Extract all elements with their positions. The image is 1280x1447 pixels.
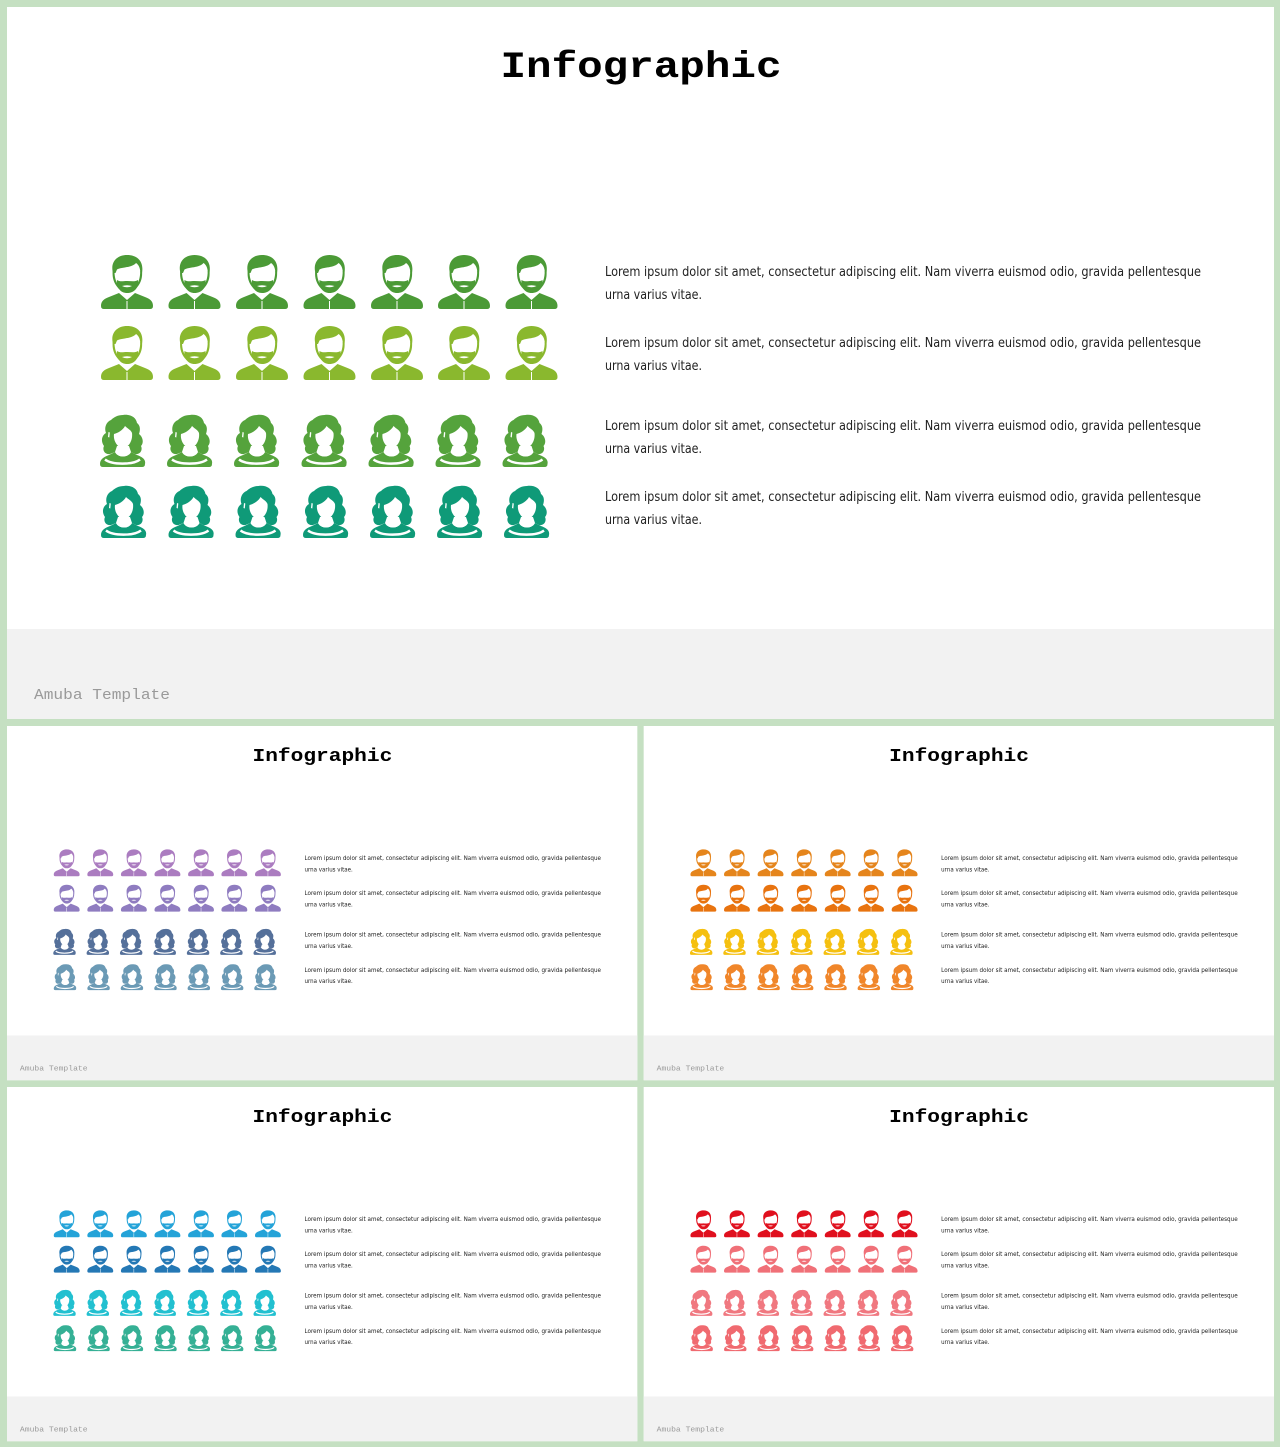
text block 3: urna varius vitae. [941,942,990,950]
text block 1: urna varius vitae. [305,865,353,873]
text block 1: urna varius vitae. [305,1226,353,1234]
panel: purple slide [7,726,637,1080]
text block 4 [305,966,601,985]
icon row: men, violet [54,885,281,912]
text block 1 [305,1215,601,1234]
text block 3: Lorem ipsum dolor sit amet, consectetur adipiscing elit. Nam viverra euismod odio, gravida pellentesque [605,419,1201,434]
text block 2: urna varius vitae. [941,1262,990,1270]
text block 2: Lorem ipsum dolor sit amet, consectetur adipiscing elit. Nam viverra euismod odio, gravida pellentesque [305,889,601,897]
text block 4: urna varius vitae. [305,1338,353,1346]
slide background [644,726,1274,1080]
slide background [7,726,637,1080]
icon row: women, yellow [690,929,913,955]
text block 2: Lorem ipsum dolor sit amet, consectetur adipiscing elit. Nam viverra euismod odio, gravida pellentesque [305,1250,601,1258]
title: Infographic [889,1107,1029,1128]
text block 3 [305,930,601,950]
icon row: women, teal [101,486,549,538]
text block 3 [941,1291,1238,1311]
text block 2: Lorem ipsum dolor sit amet, consectetur adipiscing elit. Nam viverra euismod odio, gravida pellentesque [605,336,1201,351]
text block 4: urna varius vitae. [605,513,702,528]
icon row: men, orange [690,849,918,876]
icon row: men, red [690,1210,918,1237]
icon row: men, blue [54,1246,281,1273]
text block 1 [605,265,1201,303]
icon row: women, orange [690,964,913,990]
icon row: men, dark green [101,255,558,309]
icon row: men, dark orange [690,885,918,912]
text block 4: Lorem ipsum dolor sit amet, consectetur adipiscing elit. Nam viverra euismod odio, gravida pellentesque [305,1327,601,1335]
text block 2: urna varius vitae. [941,901,990,909]
text block 1: urna varius vitae. [941,1226,990,1234]
text block 2: urna varius vitae. [605,359,702,374]
text block 1: urna varius vitae. [605,288,702,303]
text block 1: Lorem ipsum dolor sit amet, consectetur adipiscing elit. Nam viverra euismod odio, gravida pellentesque [605,265,1201,280]
text block 1 [941,1215,1238,1234]
icon row: men, light green [101,326,558,380]
icon row: men, purple [54,849,281,876]
text block 3: Lorem ipsum dolor sit amet, consectetur adipiscing elit. Nam viverra euismod odio, gravida pellentesque [305,1291,601,1299]
text block 4: urna varius vitae. [941,977,990,985]
icon row: women, cyan [53,1290,276,1316]
icon row: women, salmon [690,1290,913,1316]
panel: blue slide [7,1087,637,1441]
text block 2: urna varius vitae. [305,1262,353,1270]
text block 3: urna varius vitae. [305,942,353,950]
text block 1: Lorem ipsum dolor sit amet, consectetur adipiscing elit. Nam viverra euismod odio, gravida pellentesque [941,854,1238,862]
text block 2 [941,889,1238,909]
text block 4 [305,1327,601,1346]
icon row: women, steel blue [54,964,277,990]
footer band [7,629,1274,719]
text block 2 [305,1250,601,1270]
text block 1: Lorem ipsum dolor sit amet, consectetur adipiscing elit. Nam viverra euismod odio, gravida pellentesque [305,854,601,862]
text block 3: Lorem ipsum dolor sit amet, consectetur adipiscing elit. Nam viverra euismod odio, gravida pellentesque [305,930,601,938]
footer band [7,1035,637,1080]
text block 2 [605,336,1201,374]
text block 2 [941,1250,1238,1270]
text block 3: Lorem ipsum dolor sit amet, consectetur adipiscing elit. Nam viverra euismod odio, gravida pellentesque [941,930,1238,938]
text block 4: urna varius vitae. [305,977,353,985]
text block 4: Lorem ipsum dolor sit amet, consectetur adipiscing elit. Nam viverra euismod odio, gravida pellentesque [941,966,1238,974]
footer band [644,1035,1274,1080]
text block 3 [305,1291,601,1311]
icon row: women, sea green [54,1325,277,1351]
text block 2: urna varius vitae. [305,901,353,909]
title: Infographic [253,746,392,767]
slide background [7,7,1274,719]
slide background [644,1087,1274,1441]
text block 3 [605,419,1201,457]
text block 3: Lorem ipsum dolor sit amet, consectetur adipiscing elit. Nam viverra euismod odio, gravida pellentesque [941,1291,1238,1299]
text block 1: Lorem ipsum dolor sit amet, consectetur adipiscing elit. Nam viverra euismod odio, gravida pellentesque [305,1215,601,1223]
icon row: women, slate [53,929,276,955]
footer label: Amuba Template [20,1065,88,1073]
title: Infographic [500,47,782,89]
footer label: Amuba Template [34,687,170,704]
icon row: men, salmon [690,1246,918,1273]
text block 4: Lorem ipsum dolor sit amet, consectetur adipiscing elit. Nam viverra euismod odio, gravida pellentesque [305,966,601,974]
slide background [7,1087,637,1441]
text block 4 [941,1327,1238,1346]
text block 1 [305,854,601,873]
panel: orange slide [644,726,1274,1080]
text block 3: urna varius vitae. [305,1303,353,1311]
text block 4: urna varius vitae. [941,1338,990,1346]
title: Infographic [253,1107,392,1128]
panel: red slide [644,1087,1274,1441]
footer band [644,1396,1274,1441]
text block 4: Lorem ipsum dolor sit amet, consectetur adipiscing elit. Nam viverra euismod odio, gravida pellentesque [605,490,1201,505]
footer label: Amuba Template [657,1426,724,1434]
panel: large green slide [7,7,1274,719]
footer band [7,1396,637,1441]
icon row: women, green [100,415,548,467]
text block 4: Lorem ipsum dolor sit amet, consectetur adipiscing elit. Nam viverra euismod odio, gravida pellentesque [941,1327,1238,1335]
text block 1 [941,854,1238,873]
footer label: Amuba Template [657,1065,724,1073]
text block 3 [941,930,1238,950]
text block 2: Lorem ipsum dolor sit amet, consectetur adipiscing elit. Nam viverra euismod odio, gravida pellentesque [941,889,1238,897]
text block 2: Lorem ipsum dolor sit amet, consectetur adipiscing elit. Nam viverra euismod odio, gravida pellentesque [941,1250,1238,1258]
icon row: men, sky blue [54,1210,281,1237]
text block 3: urna varius vitae. [941,1303,990,1311]
text block 1: urna varius vitae. [941,865,990,873]
text block 2 [305,889,601,909]
title: Infographic [889,746,1029,767]
text block 4 [605,490,1201,528]
text block 1: Lorem ipsum dolor sit amet, consectetur adipiscing elit. Nam viverra euismod odio, gravida pellentesque [941,1215,1238,1223]
footer label: Amuba Template [20,1426,88,1434]
text block 4 [941,966,1238,985]
text block 3: urna varius vitae. [605,442,702,457]
icon row: women, coral [690,1325,913,1351]
